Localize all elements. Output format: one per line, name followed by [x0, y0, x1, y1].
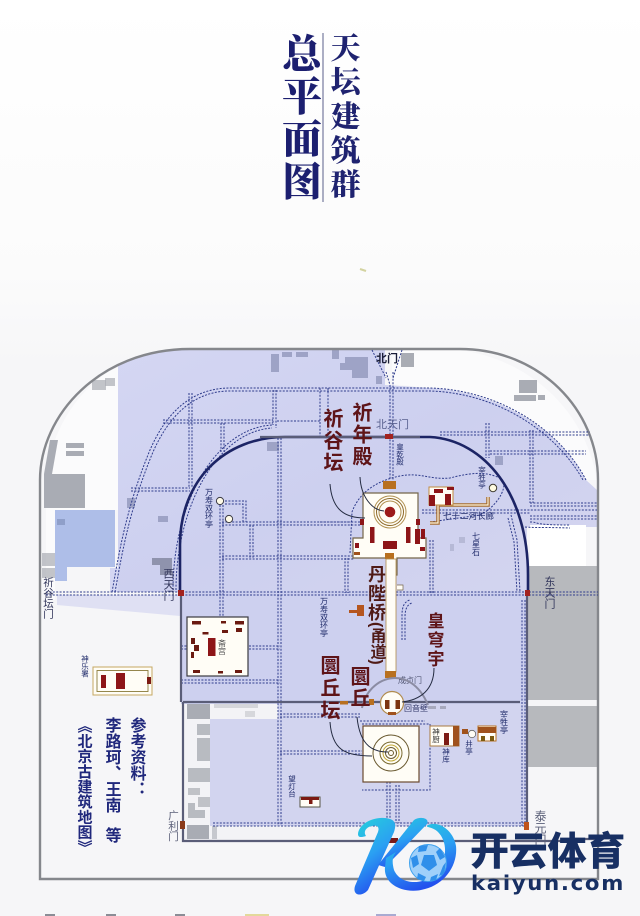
gate and small labels: 宰牲亭	[477, 465, 486, 489]
gate and small labels: 神乐署	[80, 654, 90, 679]
gate and small labels: 西天门	[162, 568, 174, 602]
title: subheading: 天坛建筑群	[326, 32, 360, 203]
compound: Hall of Prayer for Good Harvests	[353, 481, 426, 575]
gates	[178, 434, 530, 843]
gate and small labels: 北门	[376, 351, 398, 365]
heading labels: 丹陛桥	[366, 565, 386, 622]
outer wall	[40, 349, 598, 879]
watch-lamp terrace	[300, 797, 320, 807]
west pavilion gate	[349, 605, 364, 616]
gate and small labels: 井亭	[464, 739, 474, 755]
logo: K swoosh icon	[354, 818, 456, 895]
gate and small labels: 东天门	[543, 576, 556, 610]
inner wall: lower enclosure	[181, 437, 598, 841]
gate and small labels: 回音壁	[404, 703, 428, 713]
road network	[46, 350, 598, 826]
gate and small labels: 宰牲亭	[500, 709, 508, 734]
logo: wordmark: 开云体育	[470, 821, 625, 877]
map ground: lavender zones	[46, 349, 597, 877]
title	[276, 32, 360, 203]
gate and small labels: 广利门	[167, 810, 179, 842]
gate and small labels: 望灯台	[287, 774, 296, 799]
compound: Abstinence Palace: 斋宫	[218, 638, 226, 656]
logo: domain: kaiyun.com	[471, 871, 625, 895]
heading labels	[317, 402, 444, 722]
heading labels: (甬道)	[368, 622, 386, 665]
gate and small labels: 皇乾殿	[395, 442, 404, 467]
Circular Mound gate	[340, 678, 446, 715]
grey buildings	[42, 350, 545, 839]
title: main heading: 总平面图	[276, 33, 322, 203]
gate and small labels: 七十二河长廊	[443, 511, 495, 521]
label leaders	[330, 477, 434, 756]
gate and small labels	[42, 351, 556, 846]
references: 参考资料：	[128, 716, 146, 797]
gate and small labels: 七星石	[472, 532, 480, 557]
gate and small labels: 成贞门	[398, 675, 422, 685]
compound: Divine Music Office	[93, 667, 152, 695]
references: 《北京古建筑地图》	[76, 718, 92, 855]
gate and small labels: 万寿双环亭	[204, 488, 214, 528]
danbi bridge	[385, 559, 403, 678]
references	[76, 716, 146, 855]
heading labels: 祈谷坛	[320, 408, 343, 474]
Divine storehouse and pavilions: 神厨	[431, 727, 440, 743]
pavilions	[216, 497, 233, 523]
compound: Abstinence Palace	[187, 617, 248, 676]
faint mark below title	[360, 269, 366, 271]
heading labels: 圜丘坛	[317, 655, 340, 722]
cropped marks at bottom edge	[45, 914, 396, 916]
gate and small labels: 神库	[441, 747, 450, 764]
references: 李路珂、王南 等	[102, 717, 122, 843]
logo: football	[410, 844, 446, 882]
long corridor and butchery	[429, 484, 497, 523]
Divine storehouse and pavilions	[430, 726, 496, 746]
heading labels: 皇穹宇	[424, 612, 444, 669]
inner wall: arch	[180, 437, 528, 592]
heading labels: 圜丘	[347, 666, 370, 709]
gate and small labels: 祈谷坛门	[42, 577, 54, 620]
gate and small labels: 万寿双环亭	[320, 597, 328, 637]
Circular Mound Altar	[363, 726, 419, 782]
heading labels: 祈年殿	[349, 402, 372, 468]
logo	[354, 818, 625, 895]
map: plan of the Temple of Heaven	[40, 349, 598, 879]
gate and small labels: 北天门	[376, 417, 409, 431]
gate and small labels: 泰元门	[533, 810, 547, 846]
